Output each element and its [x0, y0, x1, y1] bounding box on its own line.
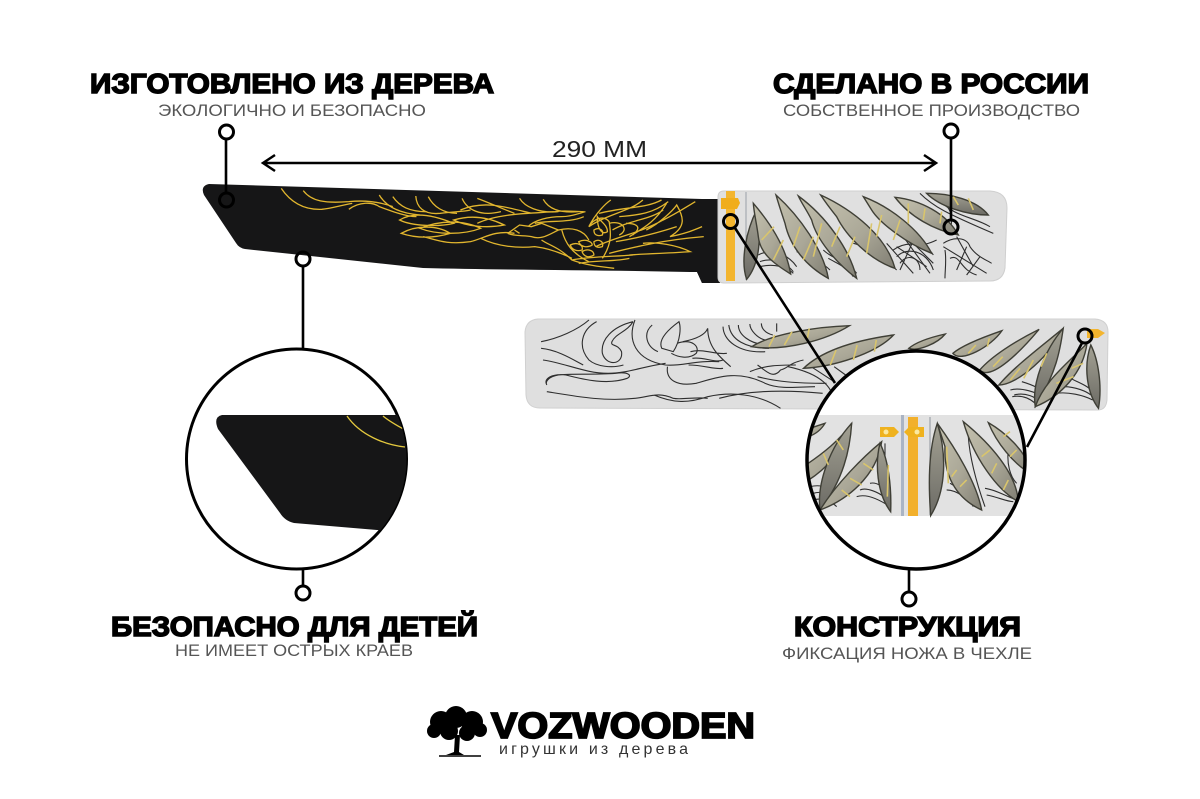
- heading: construction: [782, 611, 1032, 663]
- dimension arrow: 290 mm: 290 ММ: [552, 136, 647, 162]
- logo: VOZWOODEN: [427, 705, 755, 758]
- icon: tree: [427, 706, 487, 756]
- heading: made in Russia: [773, 68, 1089, 120]
- heading: made of wood: [90, 68, 494, 120]
- gold clip on the scabbard: [1087, 329, 1105, 338]
- callout circle: construction detail: [800, 351, 1030, 569]
- scabbard: [525, 319, 1108, 410]
- callout circle: blunt blade tip: [186, 349, 410, 569]
- heading: construction: КОНСТРУКЦИЯ: [794, 611, 1021, 642]
- heading: safe for children: [111, 610, 478, 660]
- heading: safe for children: НЕ ИМЕЕТ ОСТРЫХ КРАЕВ: [175, 641, 413, 660]
- heading: safe for children: БЕЗОПАСНО ДЛЯ ДЕТЕЙ: [111, 610, 478, 642]
- marker rings: [220, 124, 1092, 606]
- knife handle: [690, 191, 1007, 283]
- logo: VOZWOODEN: VOZWOODEN: [491, 705, 755, 746]
- connector lines: [226, 138, 1082, 592]
- heading: made of wood: ИЗГОТОВЛЕНО ИЗ ДЕРЕВА: [90, 68, 494, 99]
- heading: made of wood: ЭКОЛОГИЧНО И БЕЗОПАСНО: [158, 101, 426, 120]
- heading: made in Russia: СДЕЛАНО В РОССИИ: [773, 68, 1089, 99]
- dimension arrow: 290 mm: [263, 136, 936, 171]
- logo: VOZWOODEN: игрушки из дерева: [499, 741, 688, 758]
- heading: construction: ФИКСАЦИЯ НОЖА В ЧЕХЛЕ: [782, 644, 1032, 663]
- heading: made in Russia: СОБСТВЕННОЕ ПРОИЗВОДСТВО: [783, 101, 1080, 120]
- knife blade with phoenix engraving: [203, 184, 704, 283]
